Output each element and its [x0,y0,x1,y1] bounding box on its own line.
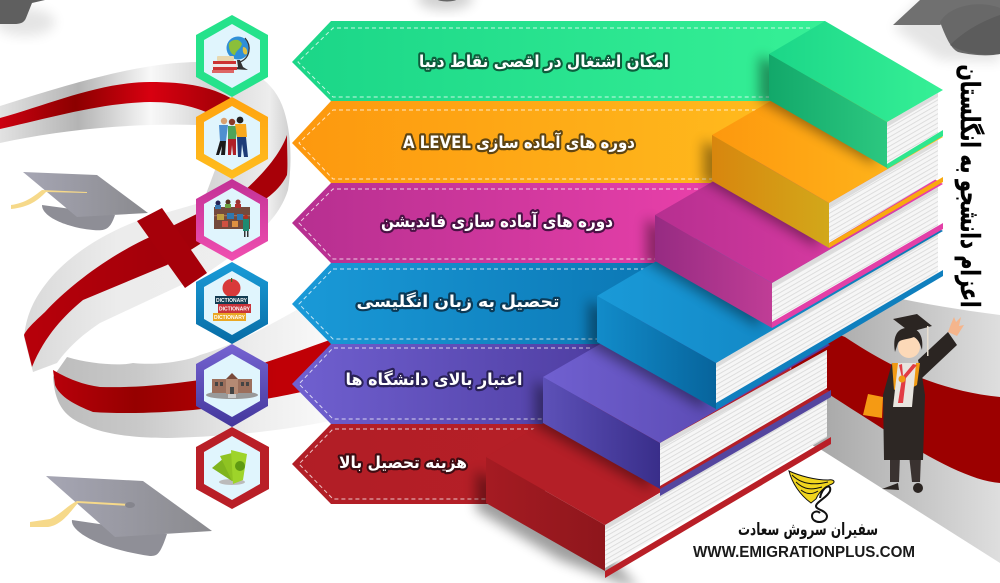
hexagon: red [196,427,269,509]
banner text: blue: تحصیل به زبان انگلیسی [356,291,560,311]
banners [292,21,825,504]
banner text: purple: اعتبار بالای دانشگاه ها [346,369,522,389]
website url: WWW.EMIGRATIONPLUS.COM [693,544,915,561]
hexagon: green [196,15,268,97]
graduation cap: top center shadow [417,0,473,10]
book: green [759,21,943,169]
red cross on ribbon [137,208,207,288]
head, hair and cap [898,336,920,358]
icon: apple and dictionaries: DICTIONARY [216,298,248,304]
book: orange [703,69,943,248]
icon: university building [206,373,258,399]
background ribbon: main diagonal band with cross [24,200,240,372]
icon: apple and dictionaries [213,278,251,321]
banner: magenta [292,183,715,263]
book: magenta [646,116,943,328]
trousers and shoes [890,455,900,482]
hexagon: orange [196,97,268,179]
icon: lecture hall [214,200,250,237]
book: red [476,324,831,583]
hexagon icons [196,15,269,509]
banner text: magenta: دوره های آماده سازی فاندیشن [381,210,613,232]
graduation cap: lower left [30,476,212,556]
background ribbon: lower right band [760,270,1000,563]
graduation cap: top left corner [0,0,55,36]
graduation cap: top right corner [893,0,1000,62]
icon: three students [216,117,248,157]
banner text: green: امکان اشتغال در اقصی نقاط دنیا [419,52,669,71]
background ribbon: lower curved band [53,290,335,438]
graduate character [863,314,964,493]
banner: green [292,21,825,101]
raised arm [918,332,957,378]
icon: globe and books [212,36,250,73]
banner: purple [292,344,600,424]
icon: apple and dictionaries: DICTIONARY [219,306,251,312]
book: blue [588,163,943,410]
folder [863,394,883,418]
logo [693,471,915,561]
icon: apple and dictionaries: DICTIONARY [214,315,246,321]
graduation cap: upper left [11,172,148,230]
hexagon: purple [196,344,268,427]
banner: red [292,424,545,504]
vertical title: اعزام دانشجو به انگلستان [954,64,985,308]
banner: blue [292,263,660,344]
icon: banknotes [212,450,247,485]
hexagon: blue [196,262,268,344]
banner: orange [292,101,775,183]
background ribbon: top curved band [0,62,290,270]
hexagon: magenta [196,179,268,261]
banner text: orange: دوره های آماده سازی A LEVEL [403,131,635,153]
logo swan mark [789,471,834,522]
logo brand name: سفیران سروش سعادت [738,520,878,540]
book stack [476,21,943,583]
gown [883,363,925,460]
book: purple [534,279,831,496]
banner text: red: هزینه تحصیل بالا [339,453,467,473]
